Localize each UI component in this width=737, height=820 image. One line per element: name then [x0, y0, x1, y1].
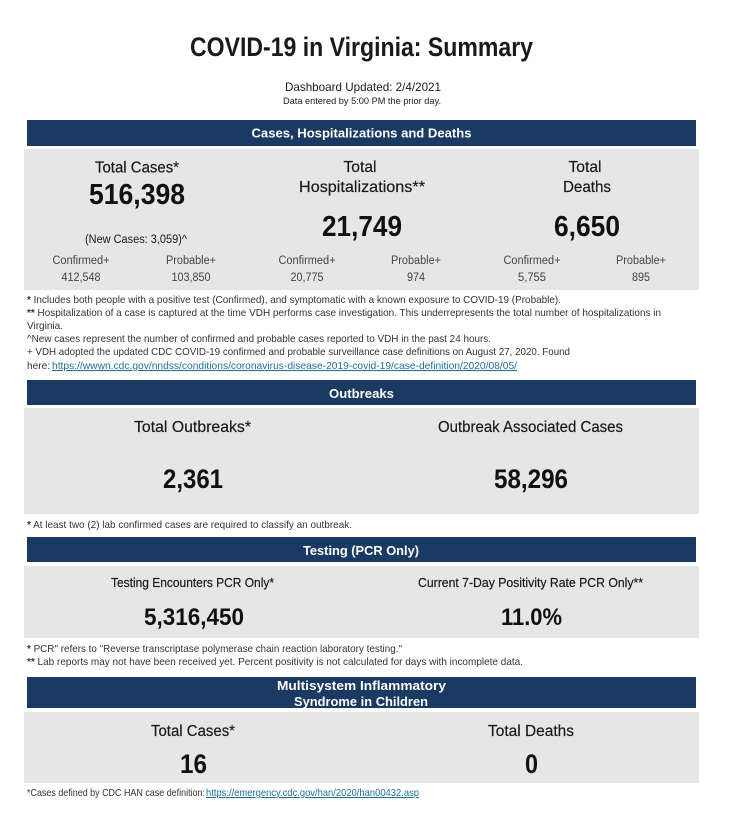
footnotes: cases: ^New cases represent the number of confirmed and probable cases reported to VDH in the past 24 hours.	[27, 333, 491, 345]
stat: total hospitalizations: Total	[344, 159, 376, 176]
stat: total deaths: Total	[568, 159, 602, 176]
dashboard update text: Data entered by 5:00 PM the prior day.	[283, 96, 441, 107]
footnotes: cases: here:	[27, 360, 50, 372]
section: outbreaks	[24, 380, 699, 531]
section: multisystem inflammatory syndrome in children	[24, 677, 699, 799]
stat: testing encounters: Testing Encounters PCR Only*	[111, 575, 274, 590]
stat: total hospitalizations: 20,775	[290, 272, 324, 284]
stat: total hospitalizations: 974	[407, 272, 426, 284]
footnote: multisystem: *Cases defined by CDC HAN case definition:	[27, 787, 205, 799]
stat: total deaths: Deaths	[563, 179, 611, 196]
panel: outbreaks	[24, 408, 699, 514]
stat: total outbreaks: Total Outbreaks*	[134, 419, 251, 436]
panel: testing	[24, 566, 699, 638]
footnote: multisystem: https://emergency.cdc.gov/han/2020/han00432.asp	[206, 787, 419, 799]
footnotes: cases: Virginia.	[27, 320, 63, 332]
stat: total cases: 412,548	[62, 272, 100, 284]
stat: total cases: Probable+	[166, 255, 216, 267]
stat: total deaths: 5,755	[518, 272, 546, 284]
stat: outbreak associated cases: Outbreak Associated Cases	[438, 419, 623, 436]
stat: total outbreaks: 2,361	[163, 464, 223, 494]
stat: total cases: 516,398	[89, 179, 185, 211]
footnotes: testing: ** Lab reports may not have been received yet. Percent positivity is not calculated for days with incomplete data.	[27, 656, 523, 668]
stat: total deaths: Probable+	[616, 255, 666, 267]
stat: total deaths: Confirmed+	[504, 255, 561, 267]
stat: total cases: Total Cases*	[151, 723, 235, 740]
footnotes: cases: ** Hospitalization of a case is captured at the time VDH performs case investigation. This underrepresents the total number of hospitalizations in	[27, 307, 661, 319]
stat: positivity rate: 11.0%	[501, 604, 562, 631]
title: COVID-19 in Virginia: Summary	[190, 32, 533, 62]
dashboard update text: Dashboard Updated: 2/4/2021	[285, 80, 441, 94]
header bar: outbreaks: Outbreaks	[329, 386, 394, 401]
header bar: cases: Cases, Hospitalizations and Deaths	[252, 126, 472, 140]
stat: total cases: Total Cases*	[95, 160, 179, 176]
stat: total deaths: 6,650	[554, 211, 620, 243]
panel: cases	[24, 149, 699, 290]
header bar: outbreaks	[27, 380, 696, 405]
stat: total hospitalizations: Confirmed+	[278, 255, 336, 267]
stat: total deaths: Total Deaths	[488, 723, 574, 740]
section: testing	[24, 537, 699, 668]
stat: total hospitalizations	[278, 159, 441, 284]
stat: positivity rate: Current 7-Day Positivity Rate PCR Only**	[418, 575, 643, 590]
header bar: testing: Testing (PCR Only)	[303, 543, 419, 558]
footnotes: cases	[27, 294, 661, 372]
header bar: testing	[27, 537, 696, 562]
dashboard update text	[283, 80, 441, 107]
stat: total cases: (New Cases: 3,059)^	[85, 234, 188, 246]
stat: total deaths: 0	[525, 749, 538, 779]
footnotes: cases: * Includes both people with a positive test (Confirmed), and symptomatic with a known exposure to COVID-19 (Probable).	[27, 294, 561, 306]
stat: outbreak associated cases	[438, 419, 623, 494]
stat: total deaths: 895	[632, 272, 650, 284]
stat: total cases: 16	[180, 749, 207, 779]
panel: multisystem	[24, 712, 699, 783]
footnotes: testing	[27, 643, 523, 668]
footnote: multisystem	[27, 787, 419, 799]
stat: positivity rate	[418, 575, 643, 631]
stat: total cases	[52, 160, 216, 284]
header bar: multisystem inflammatory syndrome: Syndrome in Children	[294, 694, 428, 709]
stat: total cases: Confirmed+	[52, 255, 110, 267]
stat: total hospitalizations: Hospitalizations**	[299, 179, 425, 196]
stat: total hospitalizations: 21,749	[322, 211, 402, 243]
stat: total cases: 103,850	[172, 272, 210, 284]
footnotes: testing: * PCR" refers to "Reverse transcriptase polymerase chain reaction laboratory testing."	[27, 643, 402, 655]
stat: total cases	[151, 723, 235, 779]
footnotes: cases: + VDH adopted the updated CDC COVID-19 confirmed and probable surveillance case definitions on August 27, 2020. Found	[27, 346, 570, 358]
stat: total deaths	[504, 159, 666, 284]
header bar: multisystem inflammatory syndrome	[27, 677, 696, 709]
header bar: multisystem inflammatory syndrome: Multisystem Inflammatory	[277, 678, 447, 693]
header bar: cases	[27, 120, 696, 146]
stat: total deaths	[488, 723, 574, 779]
stat: testing encounters	[111, 575, 274, 631]
footnote: outbreaks: * At least two (2) lab confirmed cases are required to classify an outbreak.	[27, 519, 352, 531]
stat: total outbreaks	[134, 419, 251, 494]
footnotes: cases: https://wwwn.cdc.gov/nndss/conditions/coronavirus-disease-2019-covid-19/case-definition/2020/08/05/	[52, 360, 517, 372]
stat: total hospitalizations: Probable+	[391, 255, 441, 267]
section: cases, hospitalizations and deaths	[24, 120, 699, 372]
stat: testing encounters: 5,316,450	[144, 604, 244, 631]
stat: outbreak associated cases: 58,296	[494, 464, 568, 494]
